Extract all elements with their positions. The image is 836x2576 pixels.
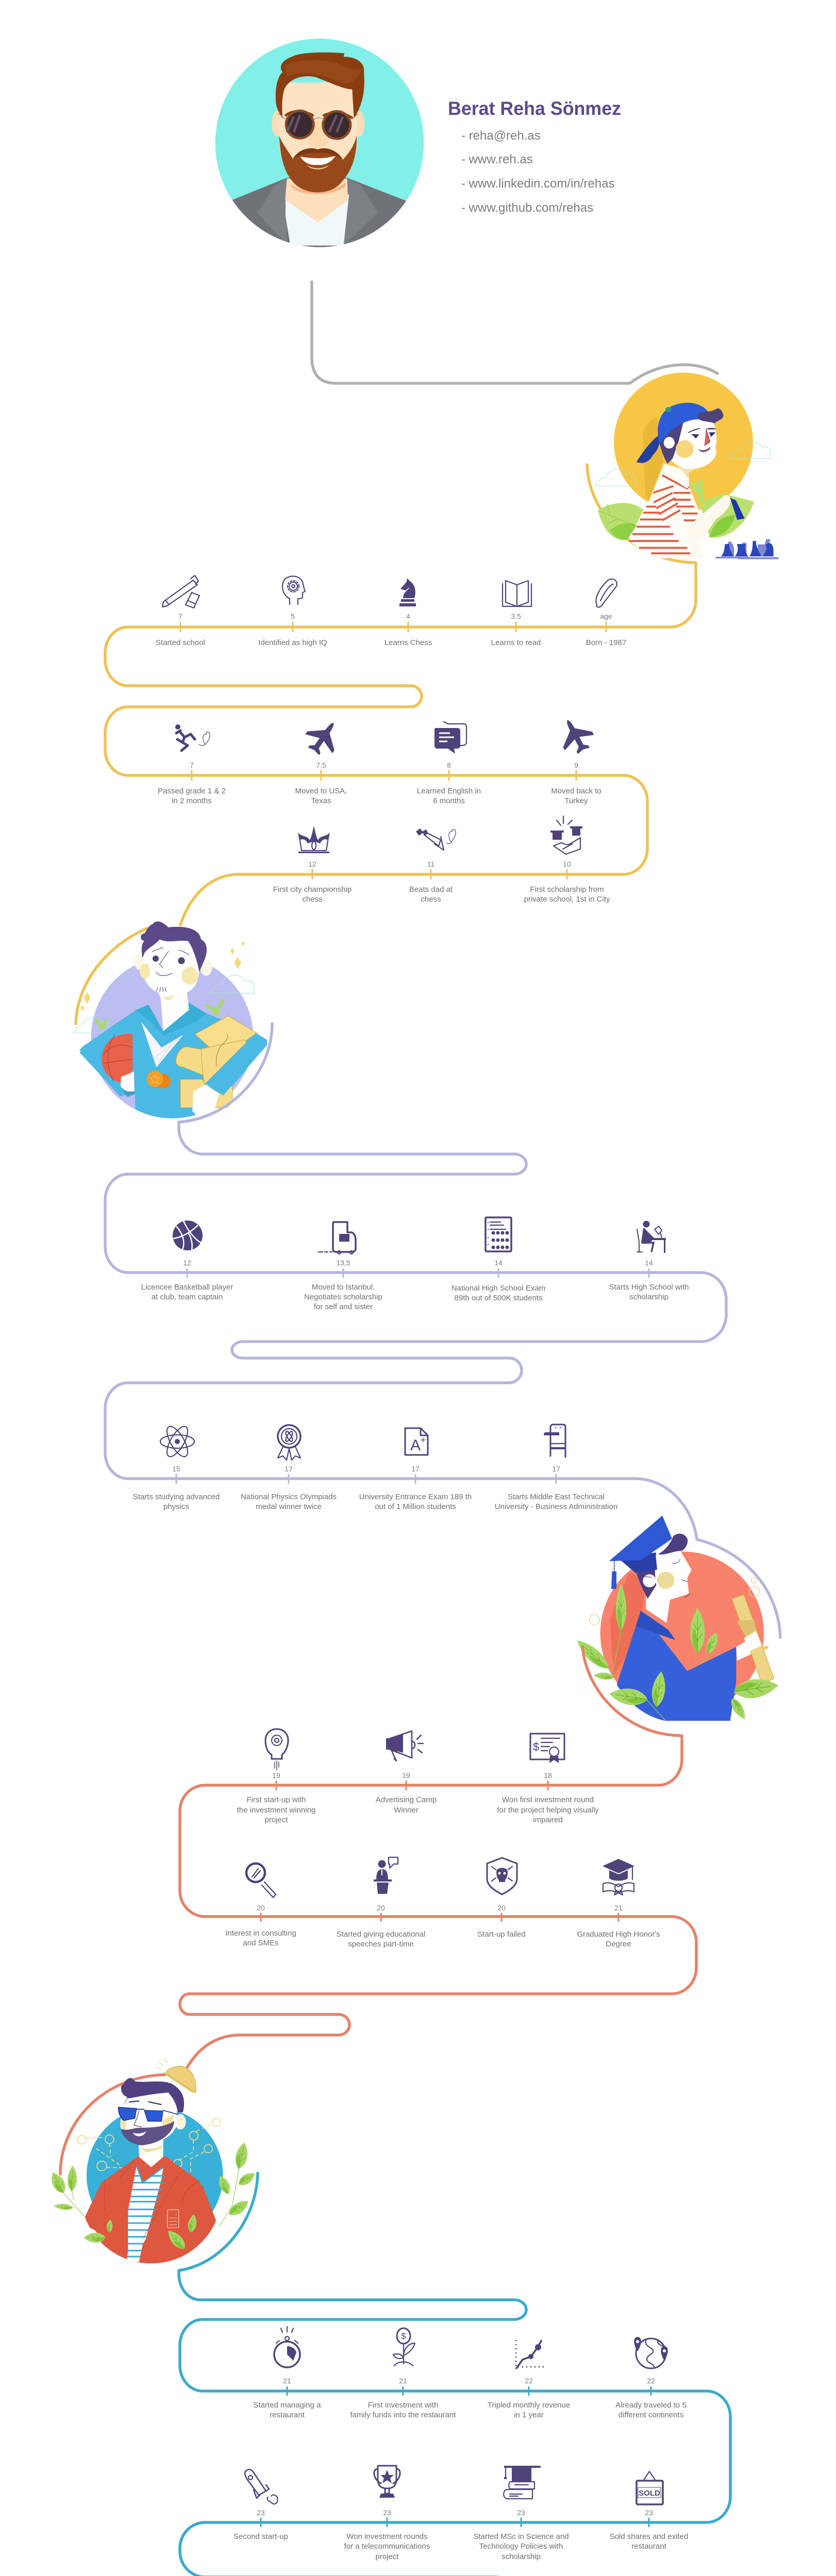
icon: sold sign: SOLD [639, 2489, 660, 2498]
milestone: first city championship: chess [302, 895, 323, 904]
milestone: first city championship [273, 826, 352, 904]
age: 23 [645, 2509, 653, 2517]
milestone: passed grade 1 and 2: in 2 months [172, 796, 212, 805]
age: 10 [563, 860, 571, 868]
icon: running child with butterfly [175, 724, 210, 751]
icon: cap on books [504, 2466, 541, 2499]
milestone: learns chess: Learns Chess [384, 638, 432, 647]
age: 9 [574, 761, 578, 769]
portrait: bearded man with sunglasses [215, 39, 424, 247]
icon: pencil and eraser [162, 575, 199, 608]
contact links: - www.github.com/rehas [461, 201, 593, 215]
milestone: starts high school: Starts High School with [609, 1283, 689, 1292]
milestone: traveled to 5 continents [615, 2337, 687, 2419]
age: 17 [552, 1465, 560, 1473]
milestone: won first investment round [497, 1734, 599, 1824]
milestone: won first investment round: for the project helping visually [497, 1806, 599, 1815]
contact links: - www.reh.as [461, 152, 533, 166]
milestone: starts high school [609, 1221, 689, 1301]
illustration: man in red jacket with sunglasses [47, 2058, 257, 2279]
milestone: tripled monthly revenue: in 1 year [514, 2411, 544, 2419]
grey connector line [312, 282, 717, 383]
milestone: starts high school: scholarship [629, 1293, 668, 1301]
milestone: studying advanced physics: physics [163, 1502, 189, 1511]
milestone: graduated high honors [577, 1859, 660, 1948]
icon: airplane [553, 713, 598, 758]
icon: A+ document [405, 1428, 428, 1455]
milestone: start-up failed: Start-up failed [477, 1930, 526, 1939]
icon: shield with skull [487, 1858, 517, 1894]
milestone: identified as high IQ [258, 576, 327, 647]
illustration: graduate with diploma [573, 1516, 779, 1722]
contact links: - www.linkedin.com/in/rehas [461, 177, 614, 191]
milestone: learns to read: Learns to read [491, 638, 541, 647]
milestone: interest in consulting [225, 1863, 296, 1947]
age: 17 [411, 1465, 420, 1473]
icon: head with gear [282, 576, 305, 604]
milestone: started managing a restaurant: Started managing a [254, 2401, 321, 2410]
icon: speech bubbles [434, 722, 466, 754]
milestone: sold shares [610, 2471, 688, 2551]
age: age [600, 612, 612, 620]
milestone: interest in consulting: Interest in consulting [225, 1929, 296, 1938]
milestone: studying advanced physics [133, 1423, 220, 1511]
orange timeline path [60, 1647, 696, 2174]
milestone: middle east technical university [495, 1425, 617, 1511]
age: 19 [402, 1771, 410, 1780]
milestone: advertising camp [376, 1731, 437, 1815]
milestone: start-up failed [477, 1858, 526, 1939]
milestone: first start-up [237, 1729, 315, 1824]
milestone: started school [156, 575, 205, 647]
milestone: national high school exam: 89th out of 500K students [455, 1294, 542, 1302]
milestone: started MSc: Started MSc in Science and [473, 2532, 569, 2541]
milestone: won investment rounds: for a telecommunications [344, 2542, 430, 2551]
milestone: learned English: 6 months [433, 796, 465, 805]
milestone: learns chess [384, 578, 432, 647]
icon: cap and diploma [603, 1859, 634, 1895]
milestone: won first investment round: Won first investment round [502, 1795, 594, 1804]
icon: coin plant [393, 2328, 415, 2366]
milestone: national physics olympiads: National Physics Olympiads [241, 1493, 337, 1501]
milestone: traveled to 5 continents: Already traveled to 5 [615, 2401, 687, 2410]
milestone: started managing a restaurant [254, 2327, 321, 2419]
milestone: started MSc [473, 2466, 569, 2561]
illustration: teenager with basketball, medal and books [73, 921, 268, 1122]
milestone: traveled to 5 continents: different continents [618, 2411, 683, 2419]
age: 21 [399, 2377, 407, 2385]
milestone: moved back to Turkey [551, 713, 601, 805]
age: 7 [178, 612, 182, 620]
milestone: middle east technical university: University - Business Administration [495, 1502, 617, 1511]
age: 5 [291, 612, 295, 620]
milestone: moved back to Turkey: Moved back to [551, 787, 601, 795]
milestone: beats dad at chess: chess [421, 895, 441, 904]
milestone: first start-up: project [264, 1816, 288, 1824]
milestone: graduated high honors: Degree [606, 1940, 631, 1948]
age: 23 [517, 2509, 525, 2517]
age: 19 [272, 1771, 280, 1780]
icon: school desk chair [544, 1425, 565, 1457]
milestone: passed grade 1 and 2 [158, 724, 226, 805]
icon: chess knight [399, 578, 416, 606]
purple timeline arc over illustration [179, 1024, 272, 1122]
milestone: second start-up: Second start-up [233, 2532, 288, 2541]
icon: certificate: $ [533, 1740, 539, 1753]
age: 21 [283, 2377, 291, 2385]
milestone: interest in consulting: and SMEs [243, 1939, 279, 1947]
milestone: licencee basketball player: at club, team captain [152, 1293, 223, 1301]
icon: A+ document: A [410, 1437, 421, 1454]
milestone: won first investment round: impaired [533, 1816, 563, 1824]
milestone: first start-up: the investment winning [237, 1806, 315, 1815]
age: 4 [406, 612, 410, 620]
age: 12 [183, 1259, 191, 1267]
milestone: advertising camp: Advertising Camp [376, 1795, 437, 1804]
milestone: started school: Started school [156, 638, 205, 647]
milestone: second start-up [233, 2469, 288, 2541]
milestone: moved to USA: Texas [311, 796, 331, 805]
milestone: national high school exam: National High School Exam [452, 1284, 545, 1293]
purple timeline path [105, 1122, 780, 1637]
age: 20 [257, 1904, 265, 1912]
icon: magnifying glass [246, 1863, 276, 1897]
milestone: first scholarship [524, 816, 610, 904]
icon: airplane [300, 714, 347, 761]
milestone: born [586, 579, 626, 647]
age: 23 [257, 2509, 265, 2517]
icon: megaphone [386, 1731, 423, 1761]
age: 21 [614, 1904, 623, 1912]
milestone: started MSc: Technology Policies with [479, 2542, 563, 2551]
illustration: boy with cap holding chess piece [595, 372, 779, 559]
age: 23 [383, 2509, 391, 2517]
heading: name: Berat Reha Sönmez [448, 98, 621, 119]
milestone: advertising camp: Winner [394, 1806, 419, 1815]
icon: light bulb with gear [265, 1729, 288, 1770]
icon: exam sheet [486, 1217, 511, 1251]
milestone: passed grade 1 and 2: Passed grade 1 & 2 [158, 787, 226, 795]
milestone: learned English: Learned English in [417, 787, 481, 795]
milestone: first investment [350, 2328, 456, 2419]
milestone: started MSc: scholarship [501, 2552, 541, 2561]
milestone: beats dad at chess [409, 828, 456, 904]
blue timeline path [105, 2173, 730, 2576]
age: 22 [647, 2377, 655, 2385]
milestone: university entrance exam: out of 1 Million students [375, 1502, 456, 1511]
age: 20 [497, 1904, 506, 1912]
milestone: moved to Istanbul: Negotiates scholarship [304, 1293, 382, 1301]
age: 15 [172, 1465, 180, 1473]
milestone: university entrance exam: University Entrance Exam 189 th [359, 1493, 472, 1501]
age: 18 [544, 1771, 552, 1780]
icon: growth chart [516, 2340, 544, 2369]
yellow timeline path [76, 465, 696, 1024]
milestone: tripled monthly revenue [488, 2340, 570, 2419]
milestone: national high school exam [452, 1217, 545, 1302]
age: 14 [645, 1259, 653, 1267]
milestone: beats dad at chess: Beats dad at [409, 885, 453, 894]
icon: basketball [173, 1221, 203, 1250]
milestone: national physics olympiads: medal winner twice [256, 1502, 322, 1511]
icon: sold sign [637, 2471, 663, 2504]
age: 17 [285, 1465, 293, 1473]
icon: trophy [374, 2466, 400, 2498]
milestone: middle east technical university: Starts Middle East Technical [508, 1493, 605, 1501]
milestone: licencee basketball player [141, 1221, 233, 1301]
milestone: learns to read [491, 581, 541, 647]
milestone: studying advanced physics: Starts studying advanced [133, 1493, 220, 1501]
milestone: sold shares: restaurant [631, 2542, 667, 2551]
milestone: first investment: First investment with [368, 2401, 438, 2410]
icon: coin plant: $ [401, 2331, 406, 2341]
milestone: educational speeches [337, 1857, 425, 1948]
age: 7 [190, 761, 194, 769]
icon: speaker at podium [374, 1857, 398, 1894]
icon: globe with pins [634, 2337, 668, 2368]
milestone: moved back to Turkey: Turkey [564, 796, 588, 805]
milestone: educational speeches: speeches part-time [348, 1940, 414, 1948]
milestone: won investment rounds [344, 2466, 430, 2561]
icon: atom [160, 1423, 194, 1460]
age: 12 [308, 860, 316, 868]
milestone: university entrance exam [359, 1428, 472, 1511]
milestone: national physics olympiads [241, 1425, 337, 1511]
milestone: moved to Istanbul: for self and sister [314, 1302, 373, 1311]
milestone: learned English [417, 722, 481, 805]
milestone: started managing a restaurant: restaurant [270, 2411, 305, 2419]
age: 13,5 [336, 1259, 350, 1267]
age: 7,5 [316, 761, 326, 769]
icon: safety pin [596, 579, 617, 607]
milestone: identified as high IQ: Identified as high IQ [258, 638, 327, 647]
icon: A+ document: + [421, 1435, 426, 1445]
milestone: first scholarship: First scholarship from [530, 885, 604, 894]
milestone: graduated high honors: Graduated High Honor's [577, 1930, 660, 1939]
milestone: won investment rounds: Won investment rounds [346, 2532, 428, 2541]
icon: moving backpack [319, 1222, 356, 1254]
milestone: moved to USA: Moved to USA, [295, 787, 347, 795]
age: 22 [525, 2377, 533, 2385]
icon: stopwatch [274, 2327, 300, 2367]
age: 8 [447, 761, 451, 769]
age: 20 [377, 1904, 385, 1912]
icon: crown [298, 826, 330, 853]
milestone: moved to Istanbul: Moved to Istanbul. [312, 1283, 375, 1292]
milestone: educational speeches: Started giving educational [337, 1930, 425, 1939]
milestone: sold shares: Sold shares and exited [610, 2532, 688, 2541]
age: 11 [427, 860, 434, 868]
icon: fallen chess king with butterfly [416, 828, 456, 850]
icon: rocket [245, 2469, 277, 2504]
milestone: moved to USA [295, 714, 347, 805]
contact links [461, 129, 614, 215]
contact links: - reha@reh.as [461, 129, 541, 143]
age: 14 [494, 1259, 503, 1267]
age: 3.5 [511, 612, 521, 620]
milestone: born: Born - 1987 [586, 638, 626, 647]
icon: open book [503, 581, 531, 606]
milestone: tripled monthly revenue: Tripled monthly revenue [488, 2401, 570, 2410]
milestone: first city championship: First city championship [273, 885, 352, 894]
icon: medal ribbon [278, 1425, 300, 1460]
icon: student at desk [637, 1221, 666, 1253]
milestone: moved to Istanbul [304, 1222, 382, 1311]
milestone: first scholarship: private school, 1st in City [524, 895, 610, 904]
icon: certificate [530, 1734, 564, 1763]
icon: graduation caps and hand [550, 816, 582, 854]
milestone: won investment rounds: project [375, 2552, 399, 2561]
milestone: licencee basketball player: Licencee Basketball player [141, 1283, 233, 1292]
milestone: first start-up: First start-up with [246, 1795, 306, 1804]
milestone: first investment: family funds into the restaurant [350, 2411, 456, 2419]
